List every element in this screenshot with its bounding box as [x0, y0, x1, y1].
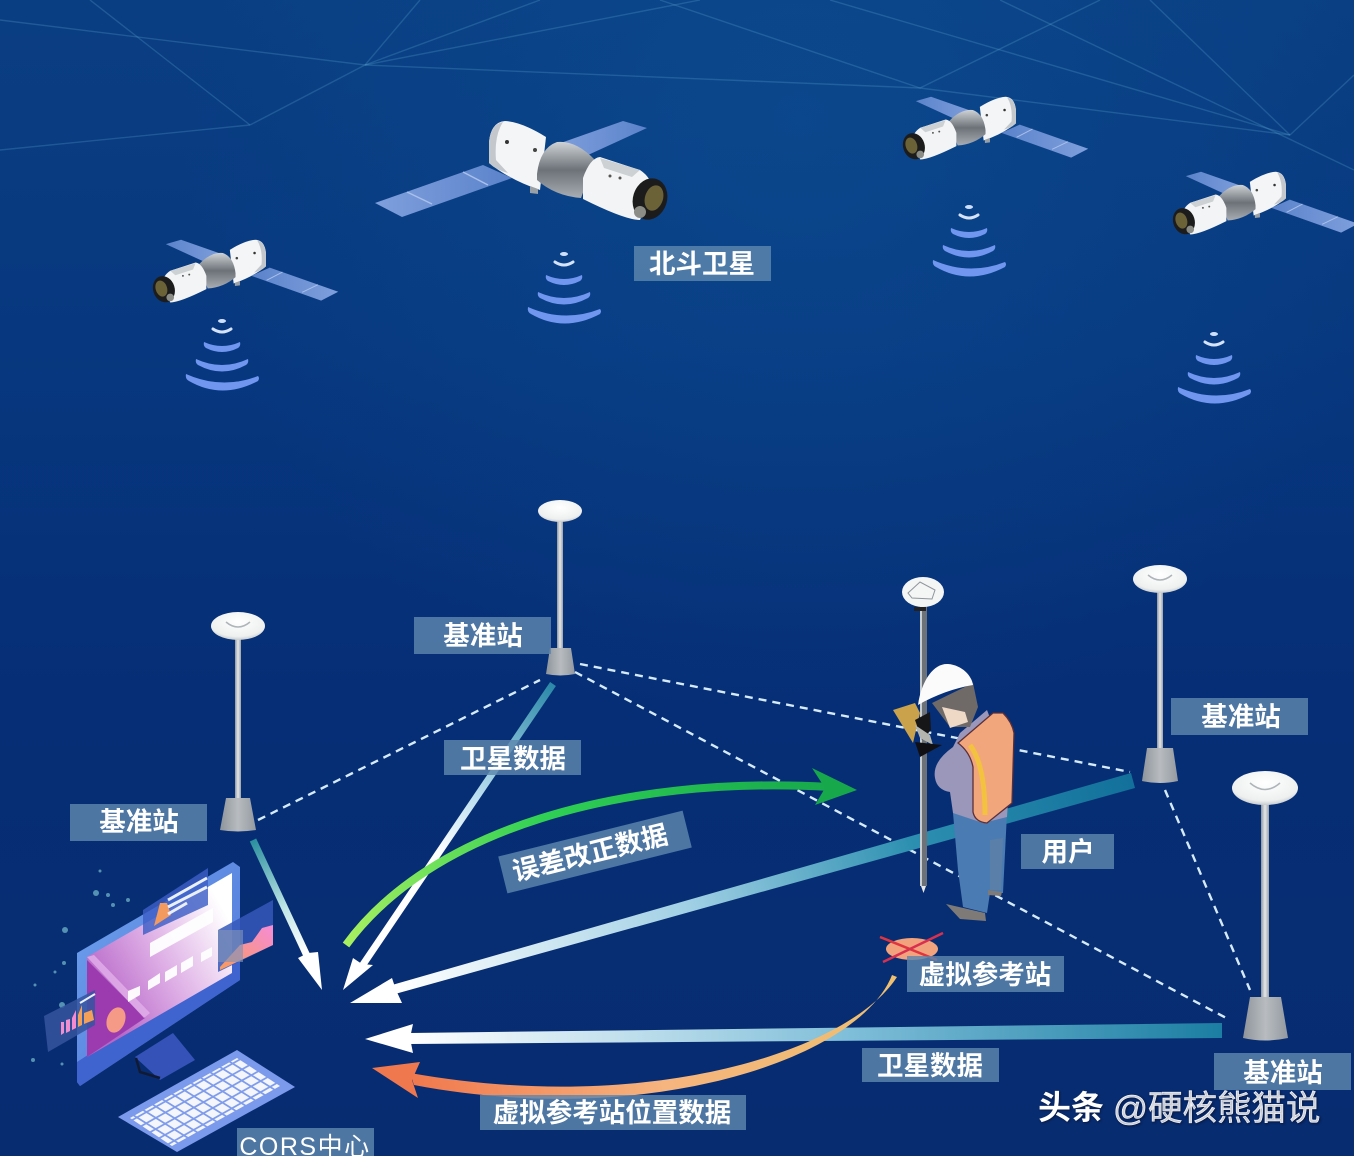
safety helmet [918, 664, 973, 705]
screen tiles [128, 908, 213, 1002]
label: base station top centre [414, 617, 551, 654]
label: satellite data (upper): 卫星数据 [460, 744, 566, 774]
base station: right [1133, 565, 1187, 783]
label: base station top centre: 基准站 [443, 621, 523, 651]
safety vest [958, 713, 1014, 823]
floating bar chart card [44, 990, 95, 1052]
CORS centre computer [31, 862, 295, 1152]
satellite: far right [1170, 172, 1354, 237]
label: satellite data (upper) [444, 740, 581, 775]
surveyor with GNSS rover pole [893, 577, 1014, 921]
arrow: centre station to CORS centre [343, 684, 553, 990]
signal waves: left satellite [186, 319, 259, 390]
label: virtual reference station position data: 虚拟参考站位置数据 [493, 1098, 731, 1128]
legs [953, 813, 1007, 913]
icon: crossed-out virtual station marker [880, 933, 943, 962]
floating profile card [143, 868, 208, 935]
dashed network baselines [258, 664, 1250, 1020]
satellite: large centre [375, 121, 673, 224]
label: base station right: 基准站 [1201, 702, 1281, 732]
arrow: virtual reference station position data (orange) [372, 975, 897, 1099]
label: base station lower right: 基准站 [1243, 1058, 1323, 1088]
screen [87, 873, 232, 1057]
label: virtual reference station: 虚拟参考站 [919, 960, 1051, 990]
monitor stand [135, 1033, 195, 1080]
signal waves: centre satellite [528, 252, 601, 324]
base station: left [211, 612, 265, 832]
signal waves: far right satellite [1178, 332, 1251, 404]
data particles [31, 870, 130, 1066]
label: error correction data [498, 811, 692, 893]
watermark: @硬核熊猫说 [1113, 1090, 1321, 1128]
label: satellite data (lower): 卫星数据 [877, 1051, 983, 1081]
arrow: error correction data (green) [346, 768, 857, 945]
arrow: left station to CORS centre [253, 840, 322, 990]
label: error correction data: 误差改正数据 [509, 819, 671, 887]
monitor body [77, 862, 240, 1086]
label: BeiDou satellites: 北斗卫星 [649, 249, 755, 279]
satellite: upper right [900, 97, 1088, 162]
torso and arm [935, 710, 1010, 823]
base station: lower right [1232, 771, 1298, 1040]
label: satellite data (lower) [862, 1048, 999, 1082]
shoes [946, 904, 986, 921]
floating area chart card [218, 900, 273, 972]
arrow: right station to CORS centre [350, 773, 1135, 1003]
label: user [1021, 834, 1114, 869]
keyboard [118, 1050, 295, 1152]
base station: top centre [538, 500, 582, 676]
label: base station left [70, 804, 207, 841]
label: user: 用户 [1042, 837, 1094, 867]
head [932, 683, 978, 727]
rover pole and antenna [902, 577, 944, 893]
label: base station left: 基准站 [99, 807, 179, 837]
signal waves: upper right satellite [933, 205, 1006, 276]
satellite: upper left [150, 240, 338, 305]
label: BeiDou satellites [634, 246, 771, 281]
label: base station right [1171, 698, 1308, 735]
arrow: lower right station to CORS centre [365, 1023, 1222, 1053]
cable [136, 1058, 160, 1078]
watermark: 头条 [1038, 1089, 1104, 1126]
label: base station lower right [1214, 1053, 1351, 1090]
handheld controller [893, 703, 920, 743]
